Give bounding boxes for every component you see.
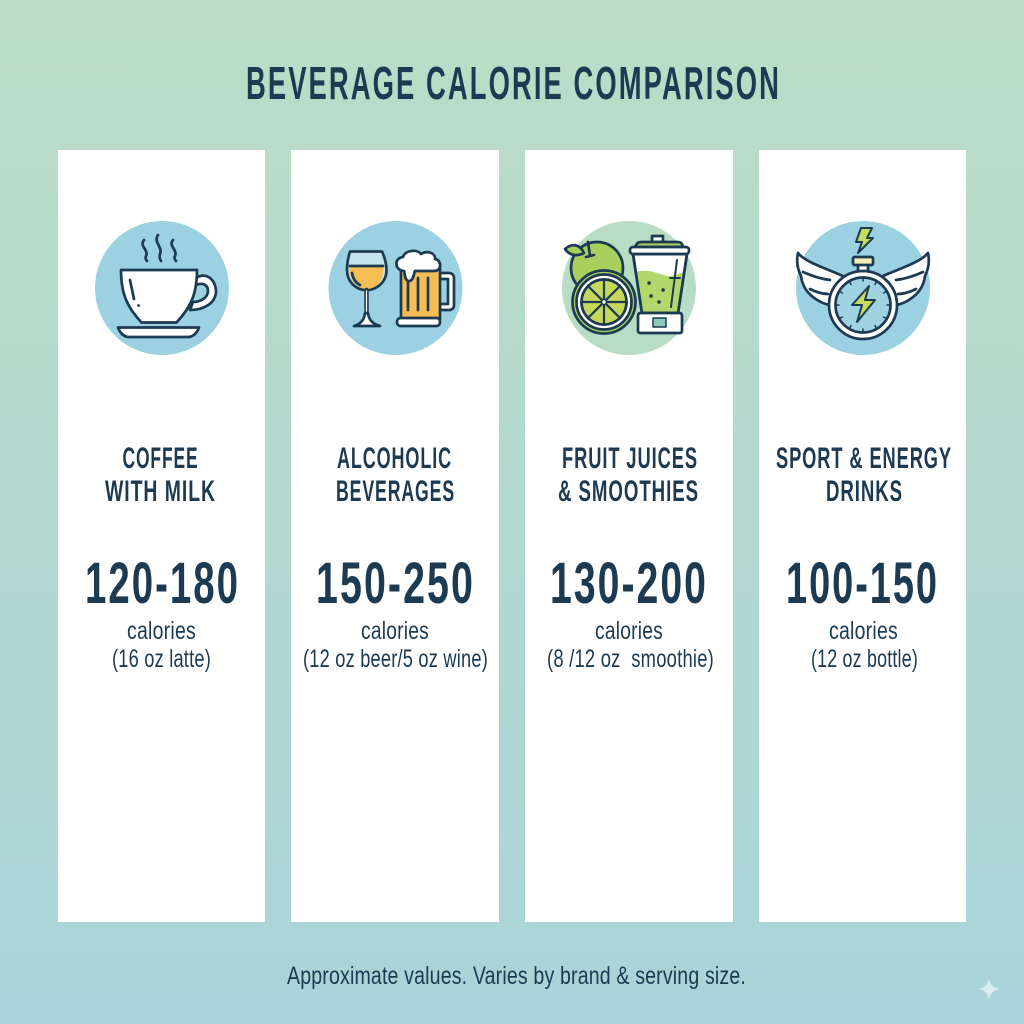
label: alcoholic beverages: ALCOHOLIC	[337, 442, 452, 475]
panel: alcoholic beverages	[291, 150, 499, 922]
unit: 12 oz beer / 5 oz wine: calories	[361, 617, 429, 645]
unit: 12 oz bottle: calories	[829, 617, 898, 645]
label: coffee with milk	[105, 442, 216, 508]
unit: 16 oz latte: calories	[127, 617, 196, 645]
icon: coffee cup	[95, 221, 229, 355]
card background	[291, 150, 499, 922]
card background	[58, 150, 265, 922]
unit: 12 oz bottle: (12 oz bottle)	[811, 645, 918, 673]
label: fruit juices and smoothies: FRUIT JUICES	[562, 442, 698, 475]
label: coffee with milk: COFFEE	[122, 442, 198, 475]
icon: sparkle	[978, 978, 1000, 1000]
unit: 12 oz beer / 5 oz wine: (12 oz beer/5 oz wine)	[303, 645, 488, 673]
footnote: Approximate values. Varies by brand & serving size.	[287, 962, 746, 990]
unit: 8 / 12 oz smoothie: calories	[595, 617, 663, 645]
label: fruit juices and smoothies	[558, 442, 699, 508]
value: 130-200: 130-200	[550, 551, 708, 616]
card background	[525, 150, 733, 922]
label: alcoholic beverages	[336, 442, 455, 508]
unit: 16 oz latte	[112, 617, 211, 673]
unit: 16 oz latte: (16 oz latte)	[112, 645, 211, 673]
label: fruit juices and smoothies: & SMOOTHIES	[558, 475, 699, 508]
value: 150-250: 150-250	[316, 551, 475, 616]
label: alcoholic beverages: BEVERAGES	[336, 475, 455, 508]
unit: 8 / 12 oz smoothie: (8 /12 oz smoothie)	[547, 645, 714, 673]
icon: citrus and blender	[562, 221, 696, 355]
value: 100-150: 100-150	[786, 551, 939, 616]
label: sport and energy drinks	[776, 442, 952, 508]
label: coffee with milk: WITH MILK	[105, 475, 216, 508]
value: 120-180: 120-180	[85, 551, 240, 616]
icon: winged stopwatch	[796, 221, 930, 355]
label: sport and energy drinks: DRINKS	[826, 475, 903, 508]
panel: sport and energy drinks	[759, 150, 966, 922]
panel: coffee with milk	[58, 150, 265, 922]
card background	[759, 150, 966, 922]
unit: 8 / 12 oz smoothie	[547, 617, 714, 673]
unit: 12 oz bottle	[811, 617, 918, 673]
panel: fruit juices and smoothies	[525, 150, 733, 922]
unit: 12 oz beer / 5 oz wine	[303, 617, 488, 673]
icon: wine glass and beer mug	[328, 221, 462, 355]
